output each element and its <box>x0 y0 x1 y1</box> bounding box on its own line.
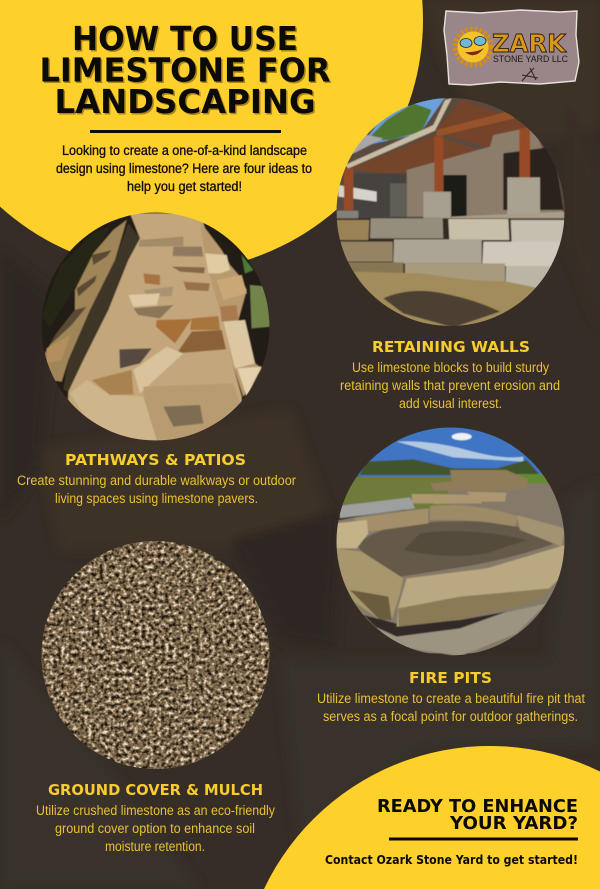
description <box>36 803 275 854</box>
logo: Ozark Stone Yard LLC <box>444 10 579 85</box>
panel: pathways and patios <box>17 210 296 506</box>
call to action <box>325 797 578 867</box>
heading: RETAINING WALLS <box>372 338 530 356</box>
shadow strip <box>63 223 140 392</box>
description: Utilize limestone to create a beautiful fire pit that <box>317 691 585 706</box>
panel: fire pits <box>317 425 585 724</box>
bottom-right yellow circle panel <box>264 746 600 889</box>
title: HOW TO USE <box>72 20 298 58</box>
title: LANDSCAPING <box>54 83 316 121</box>
description: Use limestone blocks to build sturdy <box>352 360 549 375</box>
photo: crushed limestone gravel <box>41 541 270 770</box>
icon: sun with sunglasses <box>455 29 491 65</box>
title: LIMESTONE FOR <box>40 52 330 90</box>
intro text: Looking to create a one-of-a-kind landscape <box>62 143 307 158</box>
CTA heading: READY TO ENHANCE <box>377 797 578 817</box>
title <box>40 20 332 122</box>
CTA heading: YOUR YARD? <box>449 814 578 834</box>
right wall <box>200 222 262 397</box>
path surface <box>67 213 242 443</box>
description: living spaces using limestone pavers. <box>55 491 258 506</box>
logo wordmark: ZARK <box>492 29 568 58</box>
title: LANDSCAPING <box>56 84 317 122</box>
description: ground cover option to enhance soil <box>55 821 255 836</box>
CTA heading <box>377 797 578 834</box>
description: moisture retention. <box>105 839 205 854</box>
title: HOW TO USE <box>74 22 300 60</box>
heading: GROUND COVER & MULCH <box>48 781 263 799</box>
panel: retaining walls <box>333 95 570 411</box>
intro text <box>56 143 312 194</box>
photo: limestone fire pit <box>333 425 570 657</box>
title divider <box>90 130 281 133</box>
title: LIMESTONE FOR <box>41 53 332 91</box>
photo: flagstone pathway <box>37 210 273 447</box>
description: Create stunning and durable walkways or outdoor <box>17 473 296 488</box>
top-left yellow circle panel <box>0 0 423 272</box>
heading: FIRE PITS <box>409 669 492 687</box>
description: serves as a focal point for outdoor gatherings. <box>323 709 578 724</box>
description: retaining walls that prevent erosion and <box>340 378 560 393</box>
paving stones <box>143 273 160 285</box>
photo: house with limestone retaining wall <box>333 95 570 332</box>
panel: ground cover and mulch <box>36 541 275 854</box>
description <box>340 360 560 411</box>
description: Utilize crushed limestone as an eco-friendly <box>36 803 275 818</box>
intro text: design using limestone? Here are four ideas to <box>56 161 312 176</box>
intro text: help you get started! <box>127 179 242 194</box>
CTA contact line: Contact Ozark Stone Yard to get started! <box>325 853 578 867</box>
CTA divider <box>389 838 578 840</box>
heading: PATHWAYS & PATIOS <box>65 451 246 469</box>
logo subtitle: STONE YARD LLC <box>493 54 568 65</box>
left wall <box>45 220 127 382</box>
logo stone plaque <box>444 10 579 85</box>
description <box>317 691 585 724</box>
description <box>17 473 296 506</box>
description: add visual interest. <box>399 396 502 411</box>
